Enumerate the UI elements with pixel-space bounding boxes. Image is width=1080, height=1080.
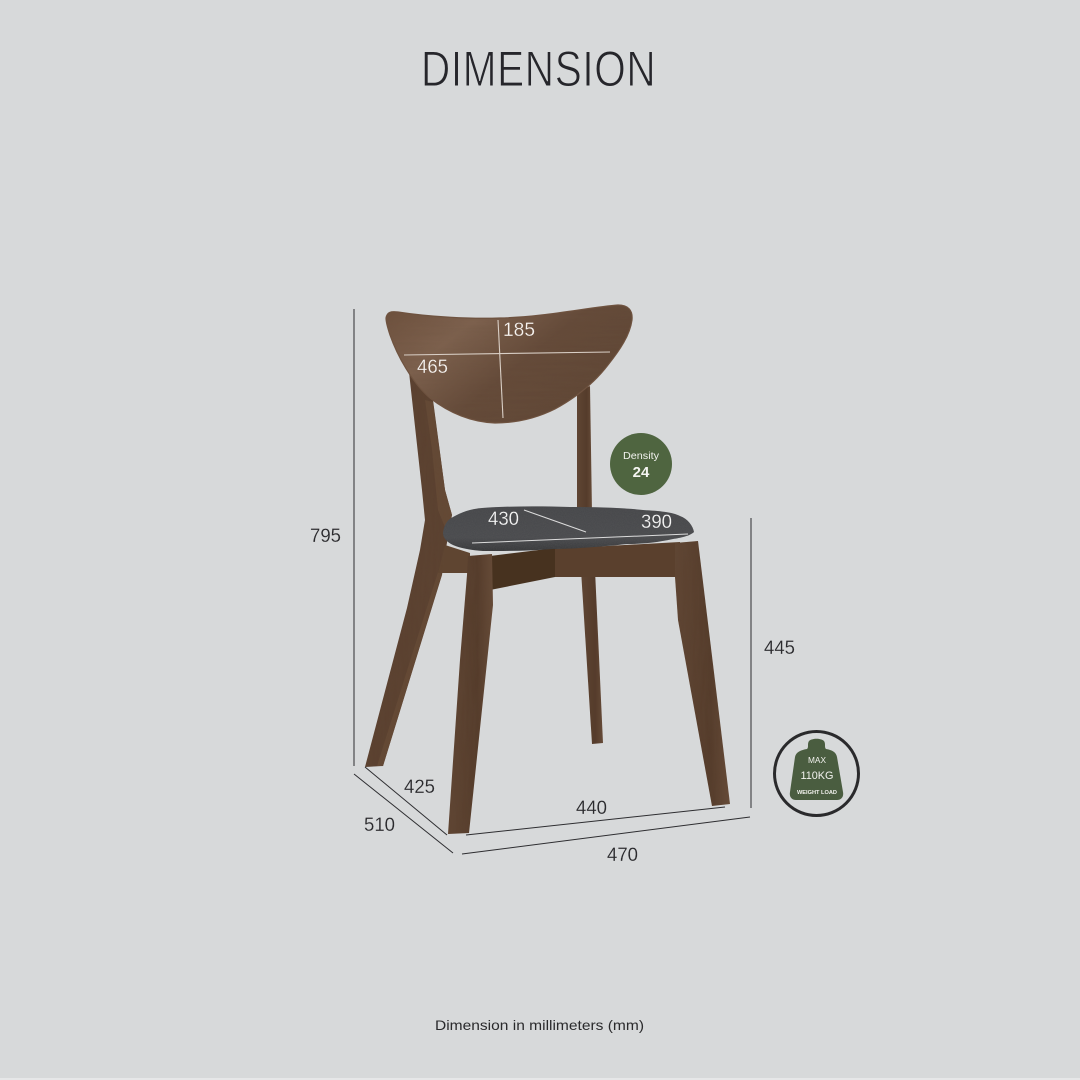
density badge bbox=[610, 433, 672, 495]
dimension lines bbox=[354, 309, 751, 854]
back left leg light face bbox=[377, 572, 442, 766]
left side rail bbox=[438, 545, 470, 573]
measurement labels on backrest bbox=[417, 320, 535, 378]
back right post bbox=[577, 386, 592, 512]
dimension labels: 510 bbox=[364, 815, 395, 836]
seat measure lines bbox=[472, 510, 688, 543]
max weight load badge: 110KG bbox=[800, 770, 834, 782]
backrest wood grain bbox=[386, 305, 632, 423]
dimension labels bbox=[310, 526, 795, 866]
dimension labels: 470 bbox=[607, 845, 638, 866]
backrest measure lines bbox=[404, 320, 610, 418]
icon: weight bbox=[790, 739, 843, 800]
dimension labels: 440 bbox=[576, 798, 607, 819]
measurement labels on seat: 430 bbox=[488, 509, 519, 530]
dimension labels: 425 bbox=[404, 777, 435, 798]
back right leg bbox=[581, 570, 603, 744]
max weight load badge: WEIGHT LOAD bbox=[797, 790, 837, 796]
chair photo bbox=[365, 305, 730, 834]
measurement labels on backrest: 465 bbox=[417, 357, 448, 378]
leg wood grain bbox=[365, 372, 730, 834]
title: DIMENSION bbox=[421, 41, 656, 97]
front right leg bbox=[675, 541, 730, 806]
front left leg bbox=[448, 554, 493, 834]
measurement labels on backrest: 185 bbox=[503, 320, 535, 341]
back left post and leg bbox=[365, 372, 452, 767]
back left post light face bbox=[425, 400, 452, 530]
measurement labels on seat: 390 bbox=[641, 512, 672, 533]
max weight load badge bbox=[774, 732, 858, 816]
measurement labels on seat bbox=[488, 509, 672, 533]
backrest bbox=[386, 305, 632, 423]
footnote: Dimension in millimeters (mm) bbox=[435, 1017, 644, 1033]
density badge: 24 bbox=[633, 464, 650, 481]
dimension labels: 445 bbox=[764, 638, 795, 659]
max weight load badge: MAX bbox=[808, 755, 826, 765]
seat fabric texture bbox=[443, 506, 694, 551]
density badge: Density bbox=[623, 451, 659, 462]
dimension labels: 795 bbox=[310, 526, 341, 547]
dark inner rail bbox=[490, 548, 555, 590]
seat cushion bbox=[443, 506, 694, 551]
front apron rail bbox=[553, 542, 680, 577]
